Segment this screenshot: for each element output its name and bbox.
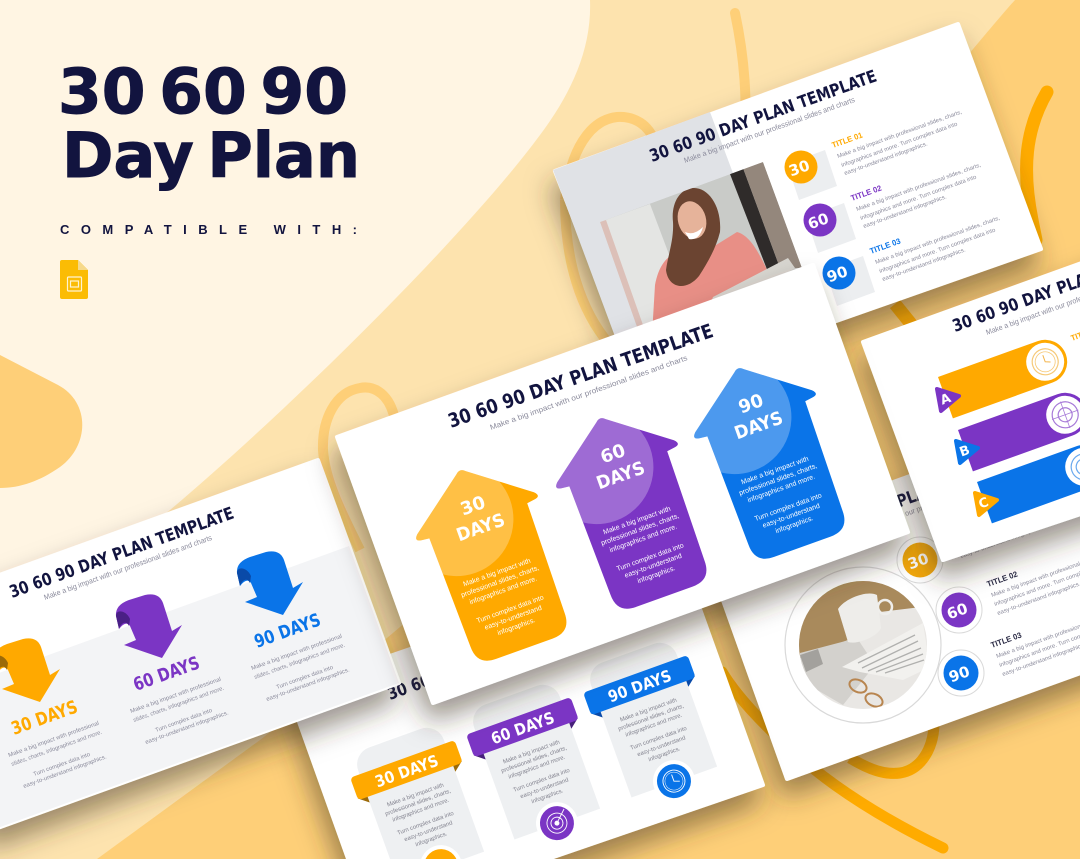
card 60 days: infographics. <box>531 788 565 805</box>
list item 30: infographics and more. Turn complex data into <box>841 122 958 169</box>
column 90 days: Make a big impact with professional <box>251 634 343 672</box>
arrow 90 days <box>694 368 844 559</box>
tag A: A <box>939 391 953 408</box>
card 90 days: easy-to-understand <box>637 735 686 758</box>
column 60 days: 60 DAYS <box>131 653 203 696</box>
list item 60: easy-to-understand infographics. <box>863 194 948 230</box>
card 90 days: Make a big impact with <box>619 698 678 724</box>
arrow 90 days: easy-to-understand <box>762 503 821 530</box>
card 30 days: Make a big impact with <box>386 783 445 809</box>
arrow 60 days <box>556 418 706 609</box>
subheading: Make a big impact with our professional slides and charts <box>43 533 213 602</box>
list item 30: Make a big impact with professional slides, charts, <box>837 109 963 160</box>
card 30 days: Turn complex data into <box>397 811 455 837</box>
card 90 days: Turn complex data into <box>630 726 688 752</box>
heading: 30 60 90 DAY PLAN TEMPLATE <box>647 67 880 167</box>
card 90 days: infographics and more. <box>625 713 684 739</box>
list item 30 <box>784 109 963 200</box>
slide: bottom right with round photo and numbered list <box>705 403 1080 779</box>
card 90 days: infographics. <box>648 746 682 763</box>
number badge 30 <box>897 537 943 583</box>
number badge 60 <box>936 587 982 633</box>
column 90 days: Turn complex data into <box>276 665 334 691</box>
arrow 30 days: easy-to-understand <box>484 605 543 632</box>
card 60 days: professional slides, charts, <box>501 745 568 775</box>
number badge 90: 90 <box>946 662 972 686</box>
list text 01: infographics and more. Turn complex data into <box>957 503 1074 550</box>
card 30 days: infographics. <box>415 831 449 848</box>
card 30 days: infographics and more. <box>392 798 451 824</box>
number badge 30: 30 <box>905 549 931 573</box>
bar A <box>938 334 1073 418</box>
column 60 days: easy-to-understand infographics. <box>145 710 230 746</box>
arrow 60 days: professional slides, charts, <box>600 513 680 547</box>
list item 60: TITLE 02 <box>850 183 883 203</box>
list item 60 <box>804 162 982 253</box>
arrow 30 days: 30 <box>458 492 488 520</box>
arrow 60 days: easy-to-understand <box>624 553 683 580</box>
column 90 days: 90 DAYS <box>252 610 324 653</box>
arrow 90 days: DAYS <box>732 408 786 444</box>
card 60 days: infographics and more. <box>508 755 567 781</box>
bar C <box>977 439 1080 523</box>
tag C: C <box>977 495 991 512</box>
tag B <box>956 441 978 463</box>
card 60 days: 60 DAYS <box>488 708 557 748</box>
title: Day Plan <box>62 119 360 192</box>
heading: 30 60 90 DAY PLAN TEMPLATE <box>445 319 716 433</box>
card 60 days <box>459 676 616 859</box>
arrow 60 days: Make a big impact with <box>602 506 672 536</box>
list item 60: infographics and more. Turn complex data into <box>860 175 977 222</box>
arrow 90 days: Turn complex data into <box>754 492 823 523</box>
arrow 30 days: DAYS <box>454 510 508 546</box>
list text 01: easy-to-understand infographics. <box>960 524 1045 560</box>
list item 90: 90 <box>824 262 850 286</box>
column 30 days: easy-to-understand infographics. <box>23 754 108 790</box>
list text 03 <box>990 609 1080 678</box>
title: 30 60 90 <box>58 55 348 128</box>
number badge 60: 60 <box>944 599 970 623</box>
card 60 days: Turn complex data into <box>513 768 571 794</box>
list text 02 <box>986 548 1080 617</box>
list item 90: Make a big impact with professional slides, charts, <box>875 215 1001 266</box>
photo: smiling woman at laptop <box>600 162 802 340</box>
column 30 days: Make a big impact with professional <box>8 721 100 759</box>
list item 30: 30 <box>786 156 812 180</box>
card 90 days <box>576 634 733 820</box>
heading mostly hidden: 30 60 90 DAY PLAN TEMPLATE <box>385 605 618 705</box>
photo: mug, papers and glasses <box>799 581 927 709</box>
slide: main centre with house arrows <box>337 265 908 703</box>
tag C <box>975 493 997 515</box>
heading: 30 60 90 DAY PLAN TEMPLATE <box>7 504 237 603</box>
list item 90 <box>822 215 1001 306</box>
list item 90: TITLE 03 <box>869 236 902 256</box>
tag B: B <box>958 443 972 460</box>
slide: bottom centre with ribbon cards <box>288 556 763 859</box>
subheading: Make a big impact with our professional slides and charts <box>489 353 689 432</box>
arrow 30 days: professional slides, charts, <box>460 565 540 599</box>
partially hidden subheading: Make a big impact with our professional slides and charts <box>835 474 1005 543</box>
column 30 days: 30 DAYS <box>9 697 81 740</box>
arrow 60 days: Turn complex data into <box>616 542 685 573</box>
list item 30: TITLE 01 <box>831 130 864 150</box>
slide: top right with photo and title list <box>553 24 1041 390</box>
icon: google slides file <box>60 260 88 299</box>
column 60 days <box>116 594 230 746</box>
arrow 90 days: infographics. <box>775 515 814 535</box>
arrow 60 days: infographics. <box>637 565 676 585</box>
slide: right with A B C bars <box>863 195 1080 560</box>
arrow 30 days <box>416 470 566 661</box>
partially hidden heading: 30 60 90 DAY PLAN TEMPLATE <box>790 450 1023 550</box>
card 30 days <box>343 719 500 859</box>
arrow 90 days: Make a big impact with <box>740 456 810 486</box>
arrow 30 days: infographics and more. <box>469 576 538 606</box>
arrow 90 days: infographics and more. <box>747 474 816 504</box>
list text 03: TITLE 03 <box>990 630 1023 650</box>
column 90 days: slides, charts, infographics and more. <box>254 643 346 681</box>
arrow 30 days: Make a big impact with <box>462 558 532 588</box>
list item 90: infographics and more. Turn complex data into <box>879 228 996 275</box>
column 30 days <box>0 638 108 790</box>
column 30 days: Turn complex data into <box>33 752 91 778</box>
list text 02: easy-to-understand infographics. <box>997 581 1080 617</box>
column 60 days: Turn complex data into <box>155 708 213 734</box>
outer ring <box>785 567 941 723</box>
list item 90: easy-to-understand infographics. <box>882 247 967 283</box>
column 90 days: easy-to-understand infographics. <box>266 667 351 703</box>
card 30 days: professional slides, charts, <box>385 788 452 818</box>
card 90 days: 90 DAYS <box>605 666 674 706</box>
subheading: Make a big impact with our professional slides and charts <box>683 95 856 165</box>
arrow 30 days: infographics. <box>497 617 536 637</box>
column 30 days: slides, charts, infographics and more. <box>11 730 103 768</box>
title <box>58 55 360 192</box>
column 90 days <box>237 551 351 703</box>
arrow 60 days: DAYS <box>594 458 648 494</box>
list item 60: Make a big impact with professional slides, charts, <box>856 162 982 213</box>
list item 30: easy-to-understand infographics. <box>844 141 929 177</box>
card 90 days: professional slides, charts, <box>618 703 685 733</box>
compatible with label: COMPATIBLE WITH: <box>60 222 357 237</box>
arrow 90 days: 90 <box>736 390 766 418</box>
card 30 days: easy-to-understand <box>404 820 453 843</box>
bar B <box>958 387 1080 471</box>
card 60 days: Make a big impact with <box>502 740 561 766</box>
tag A <box>937 389 959 411</box>
arrow 30 days: Turn complex data into <box>476 594 545 625</box>
arrow 90 days: professional slides, charts, <box>738 463 818 497</box>
list item 60: 60 <box>805 209 831 233</box>
arrow 60 days: infographics and more. <box>609 524 678 554</box>
slide: left with bent down arrows <box>0 460 399 830</box>
arrow 60 days: 60 <box>598 440 628 468</box>
card 30 days: 30 DAYS <box>372 751 441 791</box>
list text 02: TITLE 02 <box>986 569 1019 589</box>
number badge 90 <box>938 650 984 696</box>
card 60 days: easy-to-understand <box>520 777 569 800</box>
column 60 days: slides, charts, infographics and more. <box>133 686 225 724</box>
column 60 days: Make a big impact with professional <box>130 677 222 715</box>
